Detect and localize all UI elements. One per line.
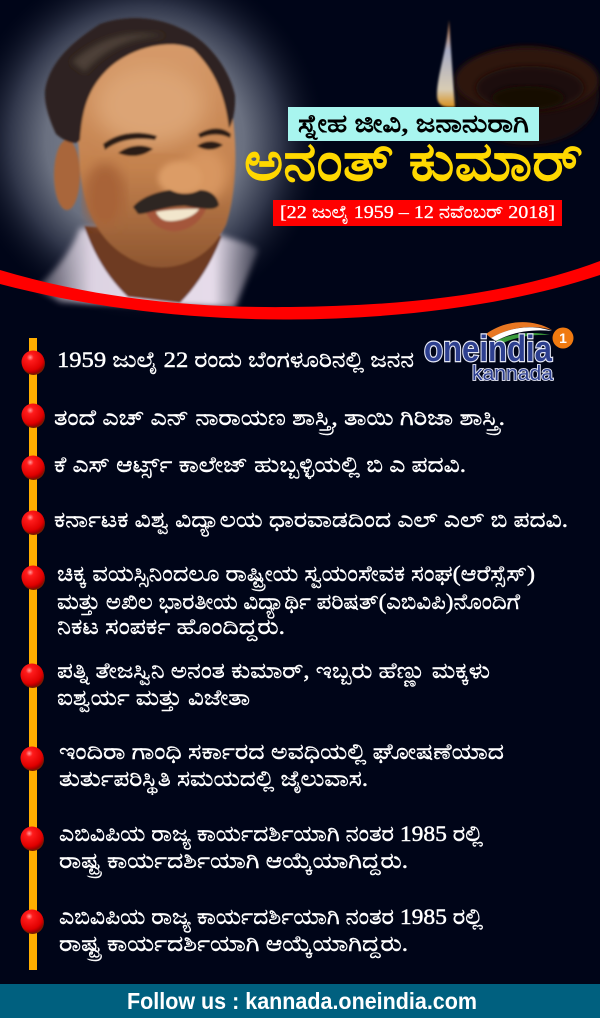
item: family [57, 658, 490, 713]
item: law degree: ಕರ್ನಾಟಕ ವಿಶ್ವ ವಿದ್ಯಾಲಯ ಧಾರವಾಡದಿಂದ ಎಲ್ ಎಲ್ ಬಿ ಪದವಿ. [54, 507, 568, 537]
title: ಅನಂತ್ ಕುಮಾರ್ [244, 132, 583, 192]
item: ABVP secretary: ರಾಷ್ಟ್ರ ಕಾರ್ಯದರ್ಶಿಯಾಗಿ ಆಯ್ಕೆಯಾಗಿದ್ದರು. [59, 848, 408, 879]
logo: oneindia kannada [424, 322, 574, 385]
item: family: ಪತ್ನಿ ತೇಜಸ್ವಿನಿ ಅನಂತ ಕುಮಾರ್, ಇಬ್ಬರು ಹೆಣ್ಣು ಮಕ್ಕಳು [57, 658, 490, 687]
subtitle banner [288, 107, 539, 141]
footer: Follow us : kannada.oneindia.com [127, 988, 477, 1014]
hair [45, 18, 235, 143]
item: birth: 1959 ಜುಲೈ 22 ರಂದು ಬೆಂಗಳೂರಿನಲ್ಲಿ ಜನನ [57, 347, 414, 375]
item: ABVP secretary repeated: ಎಬಿವಿಪಿಯ ರಾಜ್ಯ ಕಾರ್ಯದರ್ಶಿಯಾಗಿ ನಂತರ 1985 ರಲ್ಲಿ [59, 904, 483, 933]
ear [54, 140, 80, 210]
item: RSS and ABVP: ನಿಕಟ ಸಂಪರ್ಕ ಹೊಂದಿದ್ದರು. [57, 614, 285, 642]
footer [0, 984, 600, 1018]
mouth [146, 207, 207, 231]
item: RSS and ABVP: ಚಿಕ್ಕ ವಯಸ್ಸಿನಿಂದಲೂ ರಾಷ್ಟ್ರೀಯ ಸ್ವಯಂಸೇವಕ ಸಂಘ(ಆರೆಸ್ಸೆಸ್) [57, 561, 535, 592]
item: ABVP secretary repeated: ರಾಷ್ಟ್ರ ಕಾರ್ಯದರ್ಶಿಯಾಗಿ ಆಯ್ಕೆಯಾಗಿದ್ದರು. [59, 931, 408, 962]
portrait [36, 18, 258, 308]
nose [158, 161, 202, 195]
logo: oneindia kannada: kannada [472, 363, 554, 385]
item: arts degree: ಕೆ ಎಸ್ ಆರ್ಟ್ಸ್ ಕಾಲೇಜ್ ಹುಬ್ಬಳ್ಳಿಯಲ್ಲಿ ಬಿ ಎ ಪದವಿ. [54, 452, 466, 480]
item: emergency: ತುರ್ತುಪರಿಸ್ಥಿತಿ ಸಮಯದಲ್ಲಿ ಜೈಲುವಾಸ. [59, 766, 368, 796]
subtitle banner: ಸ್ನೇಹ ಜೀವಿ, ಜನಾನುರಾಗಿ [298, 111, 529, 141]
timeline bar [29, 338, 37, 970]
logo: oneindia kannada: oneindia [424, 328, 553, 369]
date banner [273, 200, 562, 226]
logo: oneindia kannada: 1 [559, 330, 567, 346]
item: RSS and ABVP: ಮತ್ತು ಅಖಿಲ ಭಾರತೀಯ ವಿದ್ಯಾರ್ಥಿ ಪರಿಷತ್(ಎಬಿವಿಪಿ)ನೊಂದಿಗೆ [57, 589, 520, 619]
red swoosh [0, 261, 600, 320]
item: parents: ತಂದೆ ಎಚ್ ಎನ್ ನಾರಾಯಣ ಶಾಸ್ತ್ರಿ, ತಾಯಿ ಗಿರಿಜಾ ಶಾಸ್ತ್ರಿ. [54, 405, 505, 436]
mustache [133, 190, 219, 214]
timeline bullets [20, 350, 45, 934]
date banner: [22 ಜುಲೈ 1959 – 12 ನವೆಂಬರ್ 2018] [280, 202, 555, 224]
face [76, 44, 235, 267]
neck [84, 226, 222, 303]
eyes [118, 146, 153, 156]
item: emergency [59, 739, 504, 796]
item: ABVP secretary: ಎಬಿವಿಪಿಯ ರಾಜ್ಯ ಕಾರ್ಯದರ್ಶಿಯಾಗಿ ನಂತರ 1985 ರಲ್ಲಿ [59, 821, 483, 850]
timeline [20, 338, 45, 970]
item: ABVP secretary [59, 821, 483, 879]
item: RSS and ABVP [57, 561, 535, 642]
shirt [36, 228, 258, 308]
eyebrows [103, 133, 157, 150]
item: ABVP secretary repeated [59, 904, 483, 962]
item: family: ಐಶ್ವರ್ಯ ಮತ್ತು ವಿಜೇತಾ [57, 685, 250, 713]
hair highlight [72, 34, 165, 72]
icon: oil lamp [437, 20, 599, 145]
item: emergency: ಇಂದಿರಾ ಗಾಂಧಿ ಸರ್ಕಾರದ ಅವಧಿಯಲ್ಲಿ ಘೋಷಣೆಯಾದ [59, 739, 504, 765]
